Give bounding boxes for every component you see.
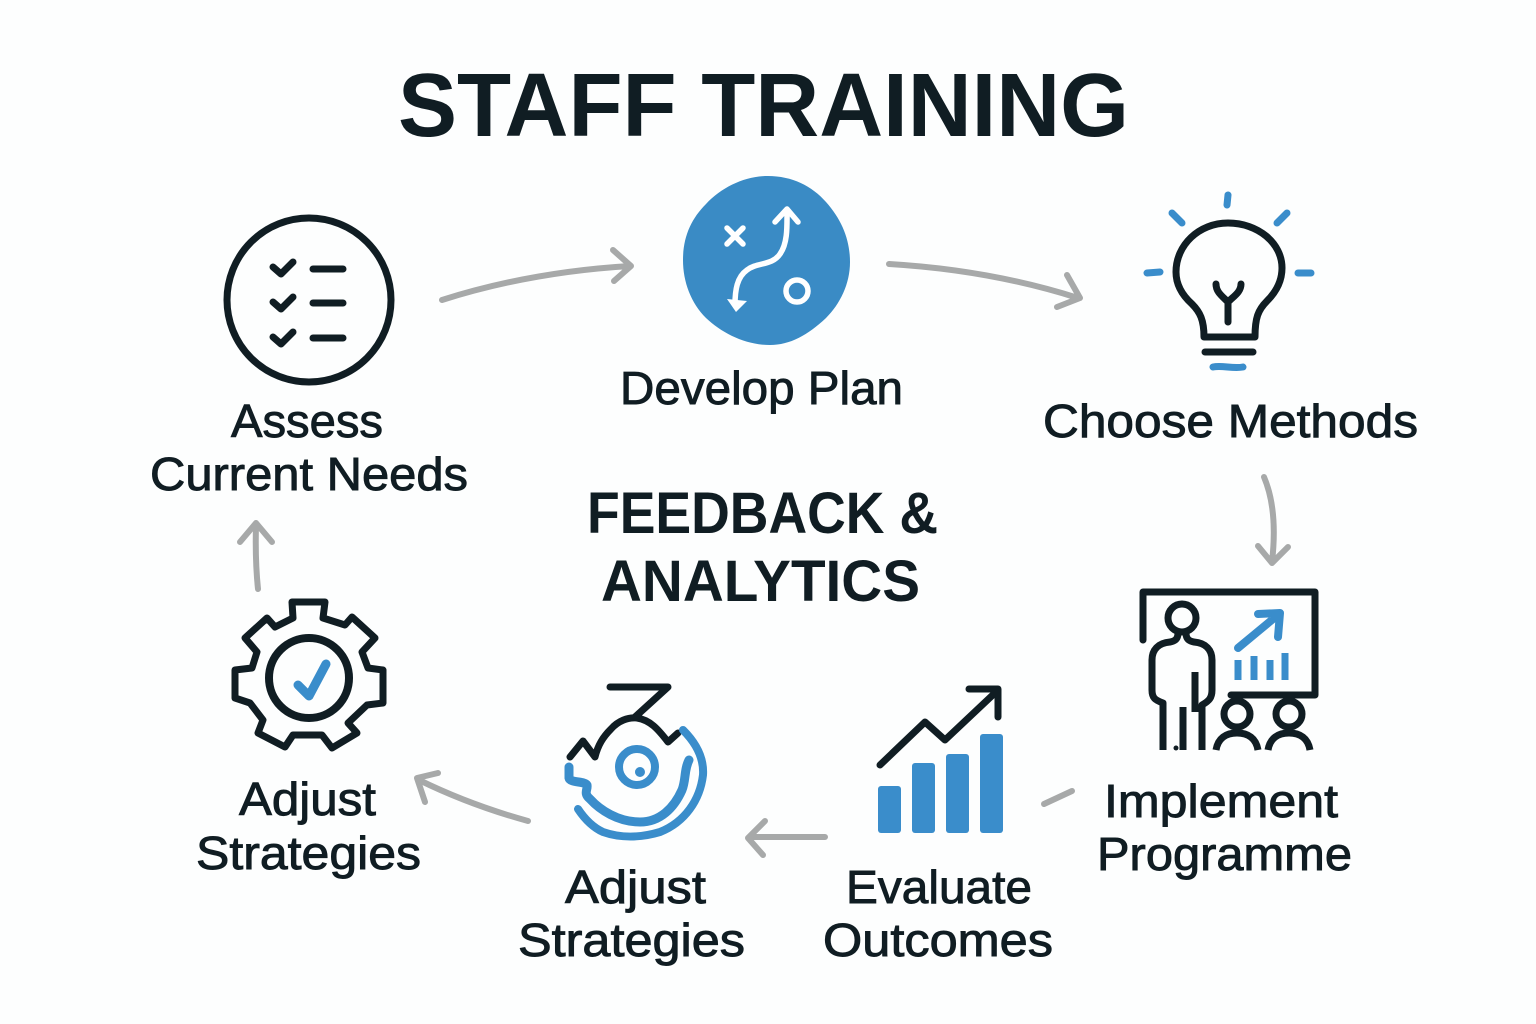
arrow: adjust to gear (417, 773, 528, 821)
label: adjust strategies (left) (196, 773, 421, 879)
label: adjust strategies (left): Adjust (239, 773, 376, 825)
arrow: gear to assess (240, 523, 272, 589)
title: STAFF TRAINING (398, 56, 1129, 156)
icon: strategy plan (683, 176, 850, 345)
icon: checklist (227, 218, 391, 382)
label: adjust strategies (middle): Strategies (518, 914, 745, 966)
label: evaluate outcomes (823, 861, 1053, 966)
label: evaluate outcomes: Evaluate (846, 861, 1032, 913)
label: implement programme: Implement (1104, 775, 1338, 827)
label: assess current needs: Current Needs (150, 448, 468, 500)
label: adjust strategies (middle): Adjust (565, 861, 706, 913)
arrow: evaluate to adjust (748, 821, 825, 855)
label: develop plan: Develop Plan (620, 362, 903, 414)
icon: gear with check (235, 602, 383, 748)
center heading (587, 481, 938, 614)
icon: circular gear dial (569, 687, 703, 836)
icon: light bulb (1147, 195, 1311, 368)
arrow: implement to evaluate (1044, 791, 1072, 804)
label: implement programme: Programme (1097, 828, 1352, 880)
label: adjust strategies (left): Strategies (196, 827, 421, 879)
label: implement programme (1097, 775, 1352, 880)
label: assess current needs (150, 395, 468, 500)
label: choose methods: Choose Methods (1043, 395, 1418, 447)
arrow: methods to implement (1258, 477, 1288, 563)
center heading: FEEDBACK & (587, 481, 938, 546)
label: evaluate outcomes: Outcomes (823, 914, 1053, 966)
arrow: plan to methods (889, 264, 1080, 307)
center heading: ANALYTICS (601, 549, 920, 614)
label: adjust strategies (middle) (518, 861, 745, 966)
icon: presenter at board (1143, 592, 1315, 750)
label: assess current needs: Assess (231, 395, 383, 447)
arrow: assess to plan (442, 250, 631, 300)
icon: rising bar chart (878, 689, 1003, 833)
